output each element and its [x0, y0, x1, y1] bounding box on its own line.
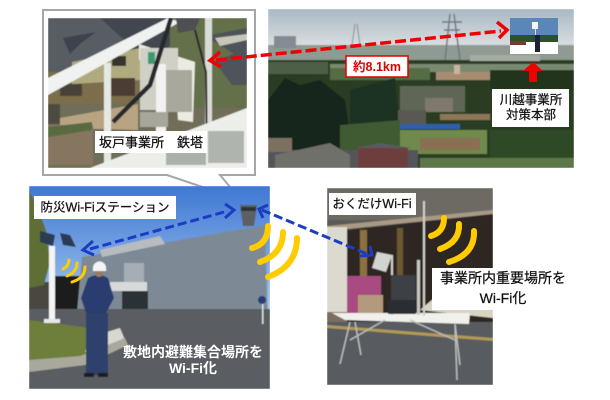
caption: on-site assembly area: 敷地内避難集合場所を	[123, 344, 263, 360]
caption: on-site assembly area	[123, 344, 263, 376]
label: Sakado office tower	[95, 131, 207, 153]
label: disaster Wi-Fi station: 防災Wi-Fiステーション	[41, 200, 169, 214]
photo: building and worker	[29, 186, 270, 389]
arrow: blue dashed arrow between station and tower	[83, 204, 234, 255]
photo: landscape view	[268, 9, 574, 168]
inset photo: person at headquarters	[510, 18, 558, 54]
arrow: red dashed double arrow 8.1km	[210, 22, 507, 67]
photo: antenna on tower	[48, 18, 247, 168]
panel: disaster Wi-Fi station photo	[29, 186, 297, 389]
label: disaster Wi-Fi station	[34, 196, 176, 219]
panel: portable Wi-Fi photo	[327, 188, 566, 385]
label: distance 8.1km	[346, 56, 408, 77]
label: Kawagoe office headquarters: 川越事業所	[500, 92, 563, 107]
callout frame with tail	[43, 10, 255, 200]
caption: important on-site locations	[432, 268, 566, 310]
panel: panorama photo with Kawagoe headquarters	[268, 9, 574, 168]
caption: important on-site locations: Wi-Fi化	[480, 290, 526, 306]
panel: Sakado office tower callout	[43, 10, 255, 200]
arrow: red up arrow	[523, 62, 543, 82]
arrow: blue dashed arrow between tower and portable unit	[259, 205, 372, 256]
photo: table with equipment	[327, 188, 493, 385]
label: Kawagoe office headquarters: 対策本部	[506, 107, 556, 122]
label: Kawagoe office headquarters	[492, 89, 569, 127]
label: Sakado office tower: 坂戸事業所 鉄塔	[99, 135, 203, 150]
caption: important on-site locations: 事業所内重要場所を	[440, 270, 566, 286]
label: portable Wi-Fi	[329, 193, 416, 215]
label: distance 8.1km: 約8.1km	[353, 59, 401, 74]
icon: large Wi-Fi waves	[252, 226, 297, 277]
icon: small Wi-Fi waves	[63, 260, 85, 282]
caption: on-site assembly area: Wi-Fi化	[169, 360, 217, 376]
label: portable Wi-Fi: おくだけWi-Fi	[332, 197, 412, 211]
icon: portable Wi-Fi waves	[431, 218, 474, 262]
